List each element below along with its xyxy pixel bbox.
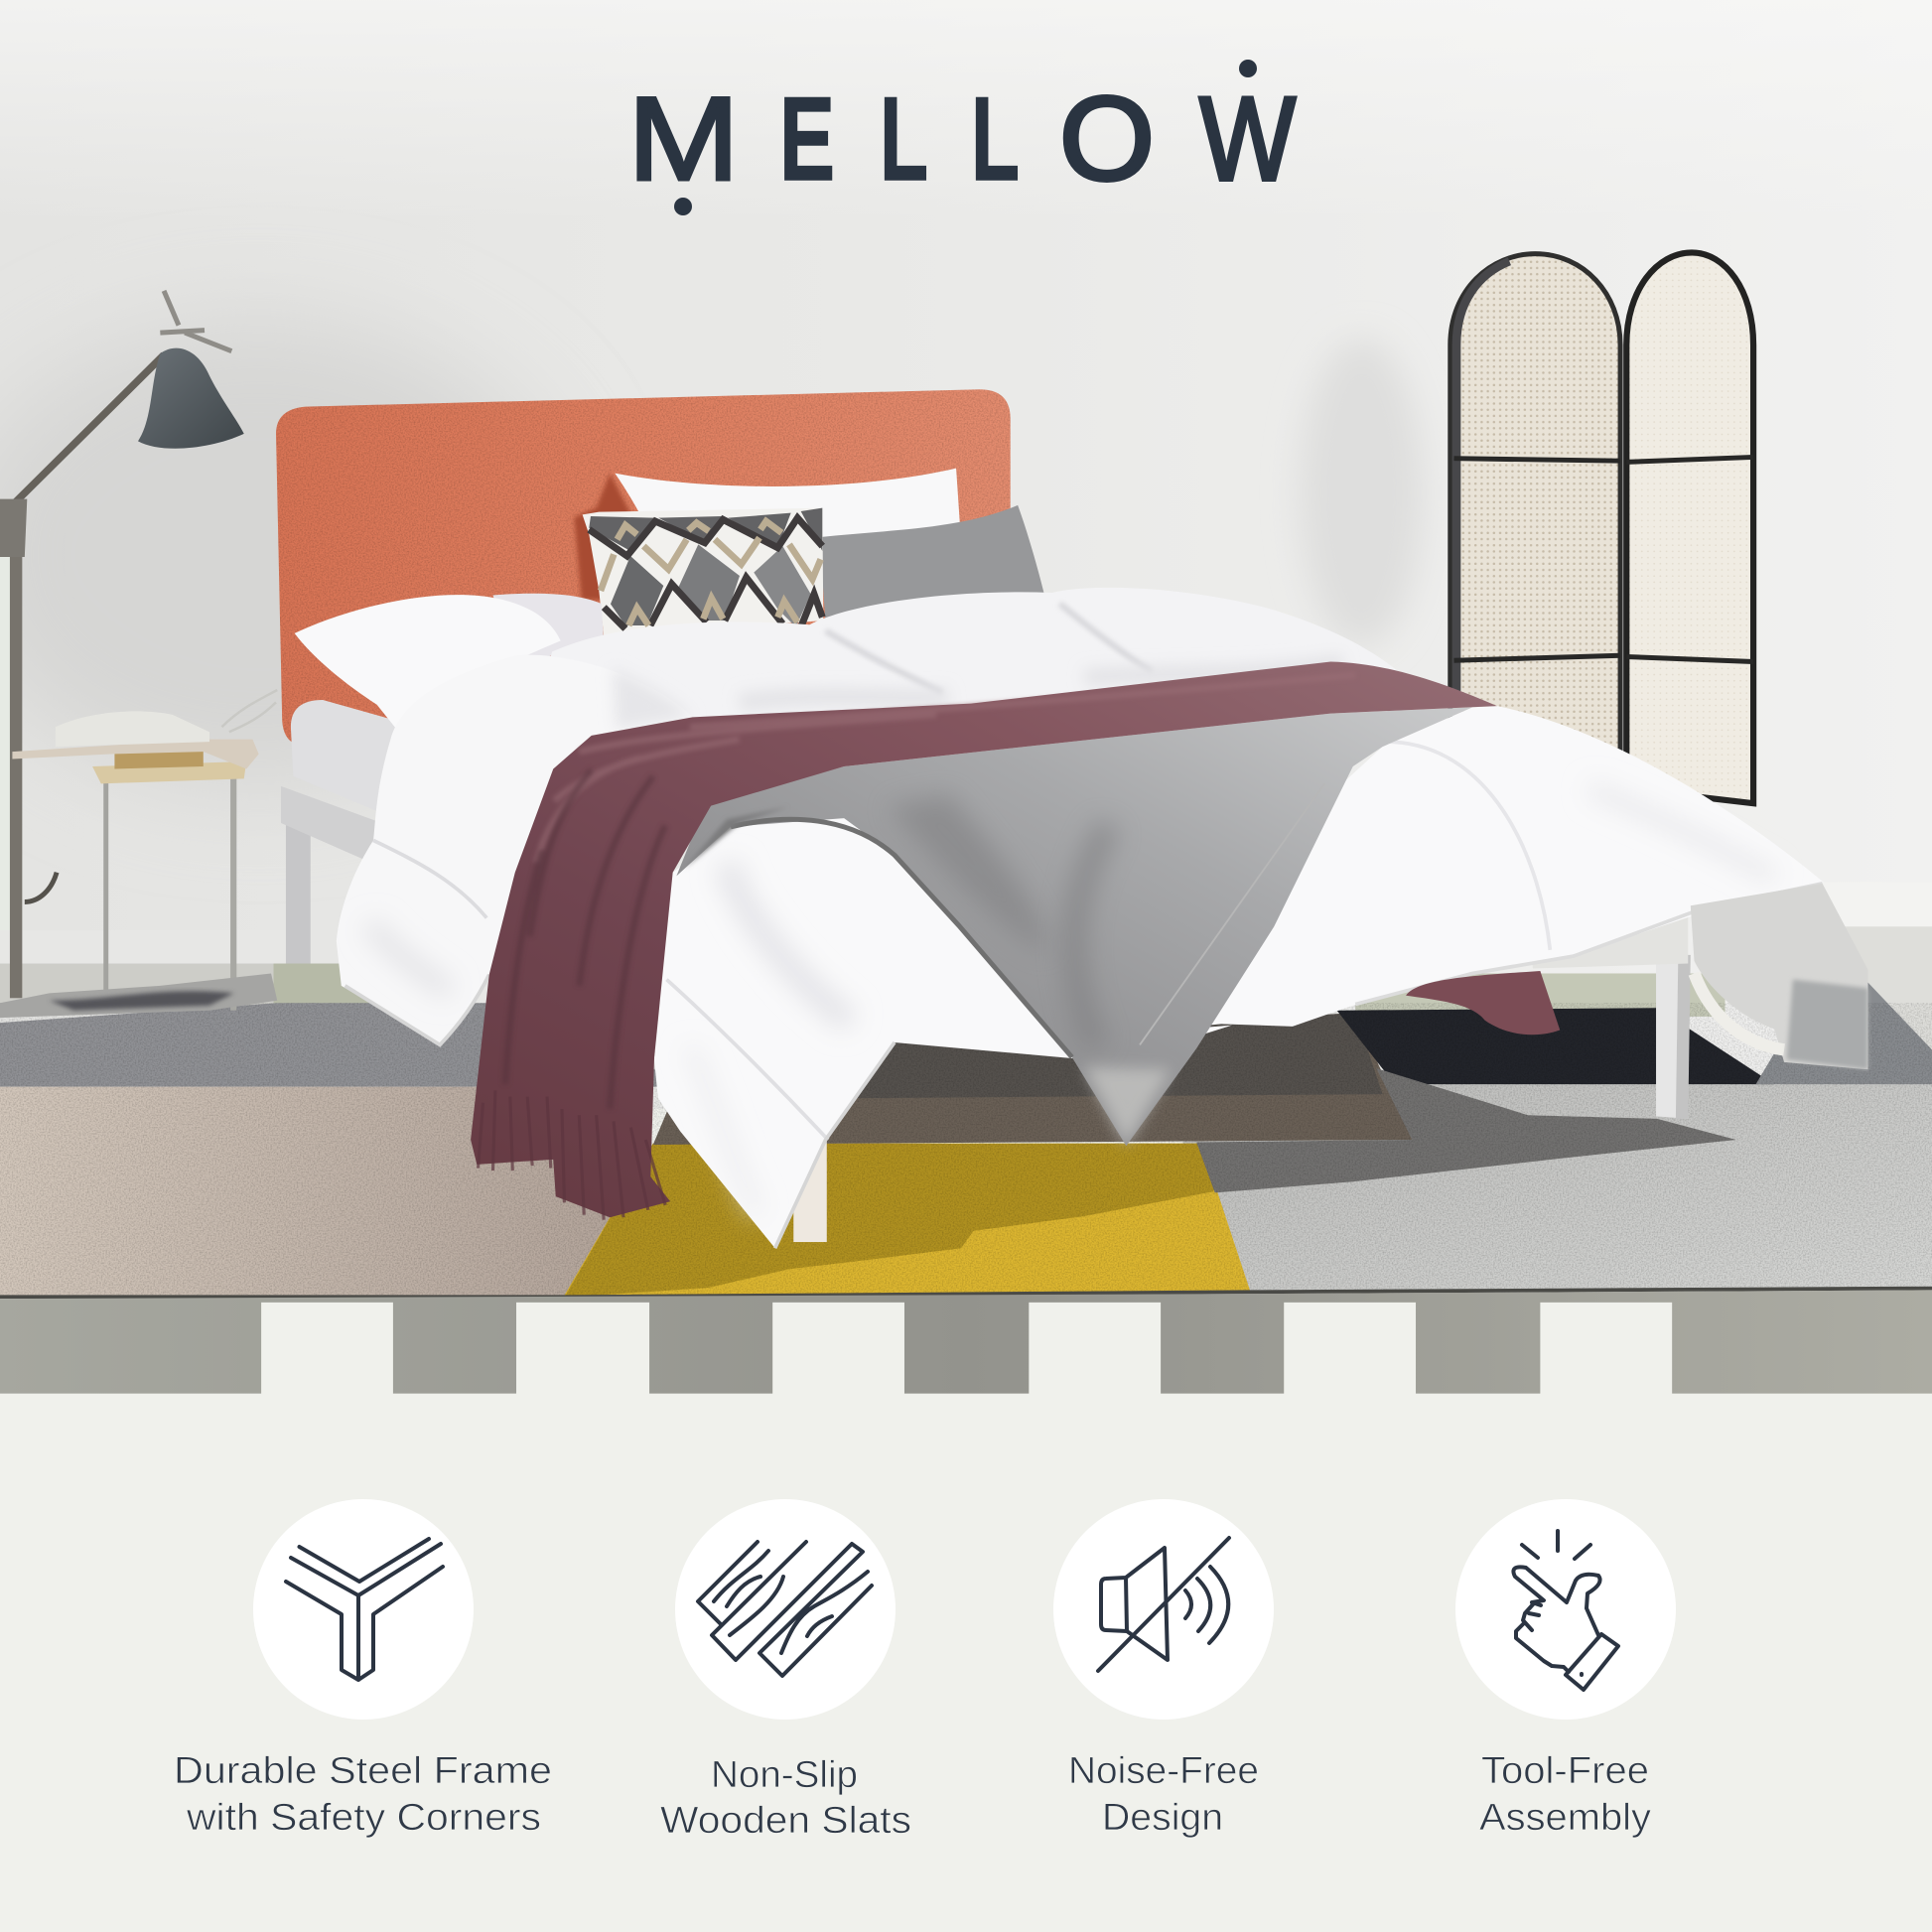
feature: wooden slats xyxy=(660,1499,911,1842)
feature: steel frame: with Safety Corners xyxy=(186,1797,541,1839)
mauve blanket xyxy=(471,661,1497,1220)
caption: Durable Steel Frame xyxy=(174,1750,552,1792)
icon: muted speaker xyxy=(1098,1538,1229,1671)
bottom panel background xyxy=(0,1394,1932,1932)
back white pillow xyxy=(615,469,961,542)
grey pillow xyxy=(819,505,1044,622)
feature: tool free xyxy=(1455,1499,1676,1839)
brand logo MELLOW: E xyxy=(779,72,835,206)
cut-out tabs: cream blocks xyxy=(261,1303,1672,1395)
under-bed shade xyxy=(653,1013,1412,1145)
duvet front panel xyxy=(654,818,1232,1248)
hanging duvet corner xyxy=(1691,884,1868,1069)
feature: tool free: Assembly xyxy=(1479,1797,1651,1839)
panel: bedroom photo xyxy=(0,0,1932,1395)
folding cane room divider xyxy=(1450,252,1753,803)
brand logo MELLOW: M xyxy=(627,72,740,206)
mattress xyxy=(291,700,419,813)
icon: steel corner xyxy=(286,1539,443,1680)
rug grain xyxy=(0,1003,1932,1299)
feature: steel frame xyxy=(174,1499,552,1839)
grey throw xyxy=(676,707,1472,1146)
icon: wooden planks xyxy=(698,1542,872,1676)
caption: Tool-Free xyxy=(1481,1750,1649,1792)
duvet right body xyxy=(1109,706,1868,1069)
yellow shadow xyxy=(564,1144,1213,1298)
brand logo MELLOW: L xyxy=(880,72,928,206)
rug xyxy=(0,949,1932,1299)
left screen panel xyxy=(1450,254,1620,752)
caption: Noise-Free xyxy=(1068,1750,1259,1792)
brand logo MELLOW: W xyxy=(1199,72,1296,206)
left pillows xyxy=(295,594,604,730)
feature: wooden slats: Wooden Slats xyxy=(660,1800,911,1842)
rear blanket fringe under bed xyxy=(1406,971,1560,1035)
brand logo MELLOW xyxy=(627,60,1296,215)
duvet upper puffs xyxy=(542,588,1399,740)
headboard texture xyxy=(271,384,1016,750)
brand logo MELLOW: O xyxy=(1059,72,1155,206)
feature: noise free xyxy=(1053,1499,1274,1839)
brand logo MELLOW: L xyxy=(971,72,1020,206)
feature: noise free: Design xyxy=(1102,1797,1223,1839)
lamp shade xyxy=(138,348,244,449)
patterned cushion xyxy=(583,508,823,637)
baseboard and floor xyxy=(0,883,1932,1062)
duvet left panel xyxy=(337,655,692,1044)
bed frame xyxy=(281,786,1691,1242)
icon: finger snap hand xyxy=(1513,1531,1618,1690)
concrete floor strip xyxy=(0,1290,1932,1394)
wall background xyxy=(0,0,1932,1109)
caption: Non-Slip xyxy=(711,1754,858,1796)
pillow shadow on headboard xyxy=(574,474,635,600)
divider cross bars xyxy=(1453,457,1753,661)
right screen panel xyxy=(1626,252,1753,803)
bed shadow on rug xyxy=(1196,1068,1736,1192)
blanket fringe xyxy=(479,1090,665,1220)
side table with books xyxy=(0,690,277,1018)
floor lamp xyxy=(0,291,244,998)
headboard xyxy=(276,389,1011,745)
